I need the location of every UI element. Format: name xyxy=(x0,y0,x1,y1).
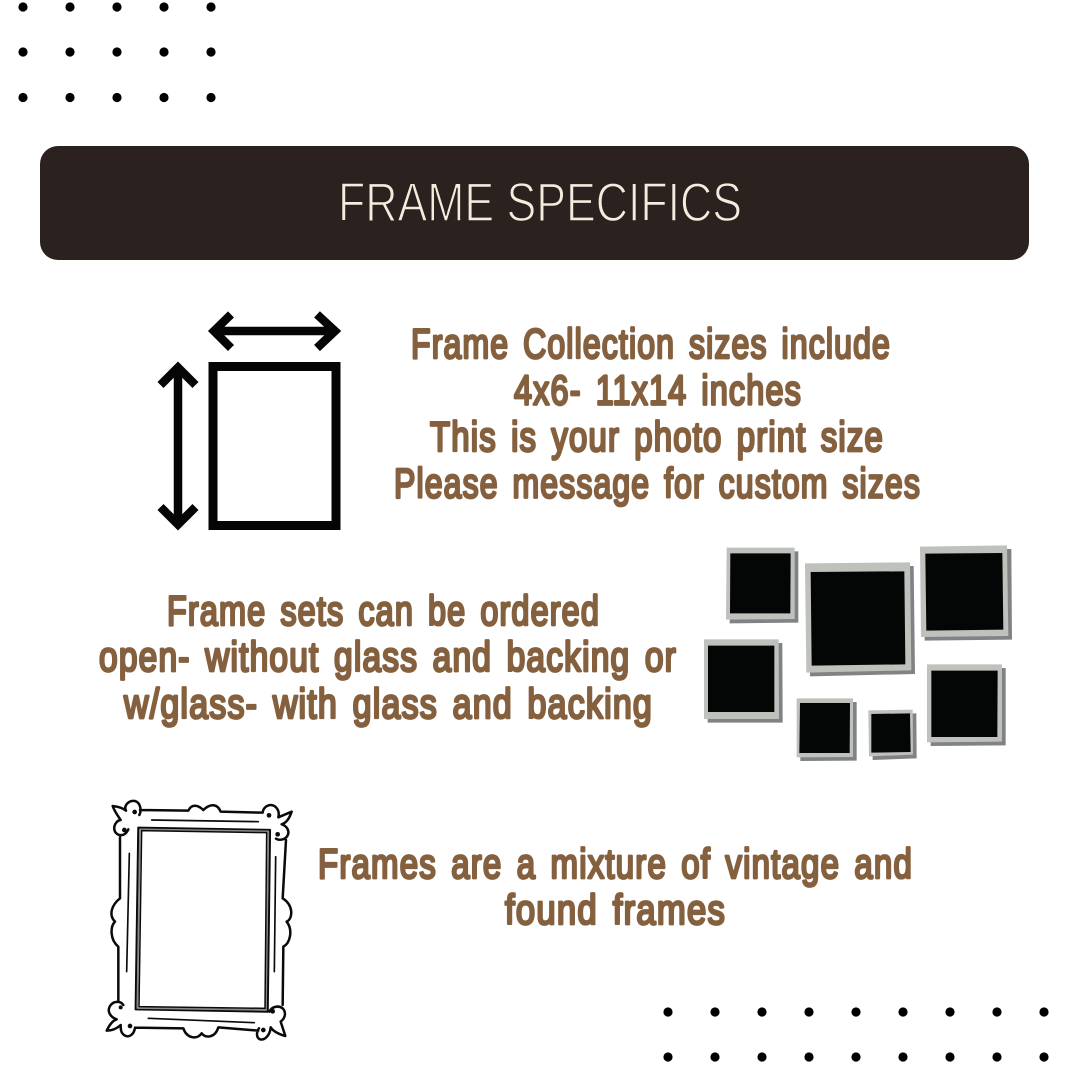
text block: collection sizes: This is your photo print size xyxy=(430,413,884,460)
title banner xyxy=(40,146,1029,260)
highlight lines xyxy=(127,820,276,1023)
icon: ornate vintage frame xyxy=(107,801,292,1040)
icon: gallery wall of frames xyxy=(704,545,1012,761)
text block: collection sizes: Frame Collection sizes include xyxy=(411,320,891,367)
frame 4 xyxy=(704,639,783,723)
text block: frame set options xyxy=(99,587,677,727)
text block: vintage and found frames: Frames are a mixture of vintage and xyxy=(318,840,913,887)
icon: frame with dimension arrows xyxy=(160,314,336,526)
frame 7 xyxy=(927,664,1006,746)
text block: frame set options: w/glass- with glass and backing xyxy=(123,680,653,727)
arrow: horizontal width xyxy=(214,314,335,348)
frame rectangle xyxy=(213,366,336,526)
text block: vintage and found frames xyxy=(318,840,913,933)
ornament dots xyxy=(119,810,280,1032)
text block: collection sizes xyxy=(394,320,921,506)
frame 6 xyxy=(868,710,917,760)
frame 1 xyxy=(726,548,798,623)
frame 3 xyxy=(920,545,1012,641)
outer ornate outline xyxy=(107,801,292,1040)
dot grid: top left xyxy=(18,2,216,102)
arrow: vertical height xyxy=(160,368,196,524)
inner frame xyxy=(136,828,270,1012)
text block: collection sizes: 4x6- 11x14 inches xyxy=(514,366,802,414)
frame 2 xyxy=(805,562,915,676)
dot grid: bottom right xyxy=(663,1007,1049,1062)
text block: vintage and found frames: found frames xyxy=(505,886,726,933)
text block: collection sizes: Please message for custom sizes xyxy=(394,460,921,506)
text block: frame set options: open- without glass and backing or xyxy=(99,633,677,680)
text block: frame set options: Frame sets can be ordered xyxy=(167,587,600,634)
frame 5 xyxy=(797,698,857,761)
title: FRAME SPECIFICS xyxy=(338,171,742,233)
